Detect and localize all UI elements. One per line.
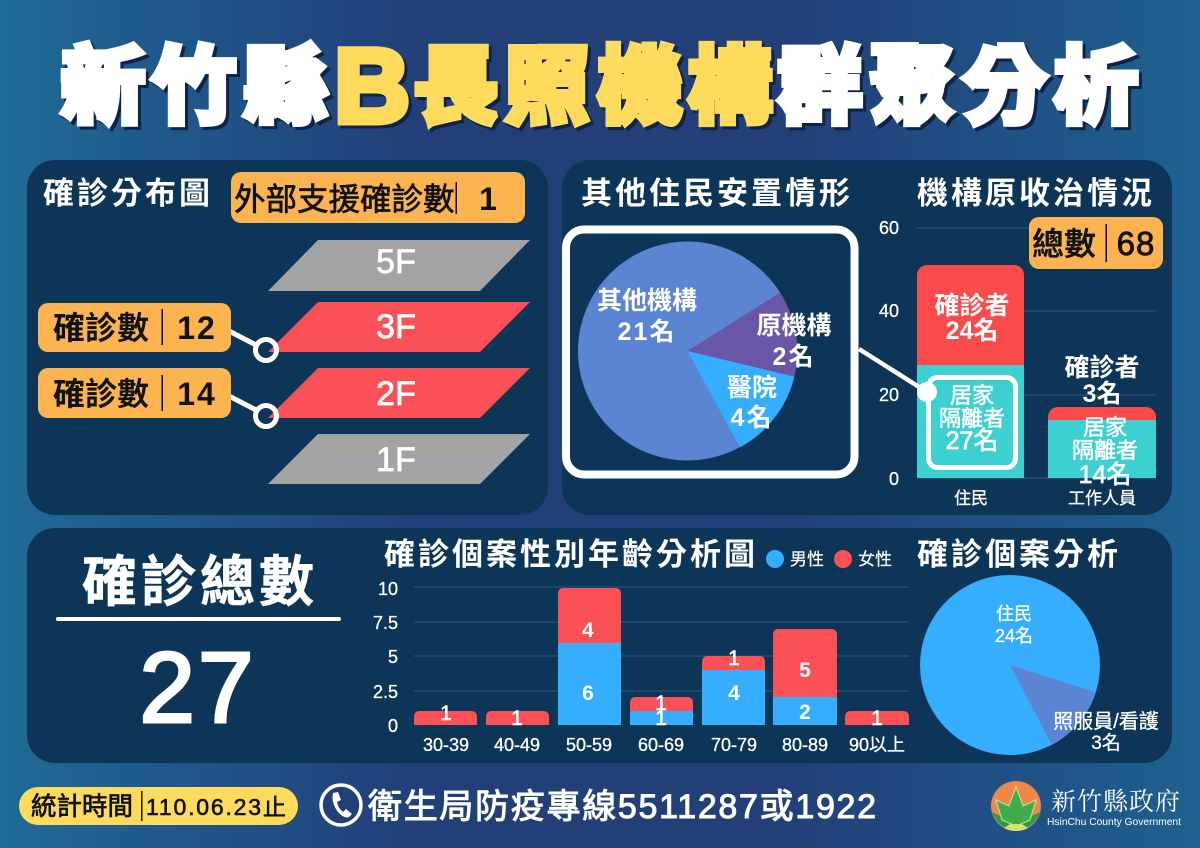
pie chart: placement: 2名 — [773, 343, 815, 371]
footer: hotline: 衛生局防疫專線5511287或1922 — [368, 788, 878, 826]
floor 3F — [268, 302, 530, 352]
title: 機 — [601, 43, 685, 137]
callout: 2F count: 14 — [177, 376, 217, 412]
floor 1F — [268, 434, 530, 484]
legend: 女性 — [858, 550, 892, 569]
bar: residents: 27名 — [946, 427, 998, 455]
bar chart: capacity: 20 — [879, 385, 899, 405]
bar: 30-39: 1 — [440, 702, 452, 725]
bar: staff — [1048, 354, 1156, 489]
callout: external support: 1 — [479, 181, 497, 217]
bar: residents: 隔離者 — [939, 406, 1005, 431]
bar: staff: 居家 — [1083, 415, 1127, 440]
total confirmed — [56, 551, 341, 744]
age labels — [423, 735, 905, 755]
bar: staff: 3名 — [1083, 380, 1121, 408]
callout: external support: 外部支援確診數 — [234, 181, 455, 217]
panel: residents — [562, 160, 1172, 515]
highlight frame — [566, 230, 854, 474]
heading: other residents placement: 其他住民安置情形 — [581, 176, 853, 211]
age labels: 90以上 — [849, 735, 905, 755]
title: 構 — [688, 40, 772, 134]
bar: staff: 14名 — [1079, 461, 1131, 489]
pie chart: cases: 照服員/看護 — [1053, 710, 1159, 733]
bar: 70-79: 1 — [728, 647, 740, 670]
bar: 40-49: 1 — [511, 707, 523, 730]
floor 2F: 2F — [376, 375, 416, 413]
title: 聚 — [873, 43, 957, 137]
callout: 2F count — [38, 368, 276, 426]
footer: statistics time: 110.06.23止 — [146, 794, 288, 820]
pie chart: cases — [920, 575, 1159, 755]
floor 3F: 3F — [376, 308, 416, 346]
pie chart: cases: 住民 — [996, 604, 1032, 624]
logo: 新竹縣政府 — [1051, 782, 1181, 818]
stacked bar chart: 0 — [388, 716, 398, 736]
callout: total: 總數 — [1032, 226, 1096, 262]
callout: external support — [231, 172, 525, 223]
title: 縣 — [244, 40, 328, 134]
axis labels — [954, 489, 1136, 508]
axis labels: 住民 — [954, 489, 988, 508]
total confirmed: 27 — [139, 632, 257, 744]
age labels: 80-89 — [782, 735, 828, 755]
stacked bar chart: 2.5 — [373, 682, 398, 702]
bar: 90+: 1 — [871, 707, 883, 730]
title: 長 — [414, 40, 498, 134]
title: 聚 — [870, 40, 954, 134]
bar: 90+ — [845, 707, 909, 730]
bar: 50-59 — [558, 588, 621, 725]
stacked bar chart — [373, 579, 909, 755]
callout: total — [1029, 217, 1163, 269]
icon: phone — [321, 785, 361, 825]
label: other facilities: 其他機構 — [597, 287, 697, 315]
bar: 80-89: 2 — [799, 701, 811, 724]
bar: 80-89: 5 — [799, 659, 811, 682]
callout: 2F count: 確診數 — [53, 376, 149, 412]
callout: 3F count: 確診數 — [53, 310, 149, 346]
title: 縣 — [247, 43, 331, 137]
age labels: 70-79 — [711, 735, 757, 755]
title: 照 — [508, 43, 592, 137]
floor 1F: 1F — [376, 441, 416, 479]
connector line — [859, 349, 937, 402]
stacked bar chart: 10 — [378, 579, 398, 599]
heading: original capacity: 機構原收治情況 — [917, 176, 1155, 211]
bar: staff: 確診者 — [1064, 354, 1140, 382]
heading: sex age chart: 確診個案性別年齡分析圖 — [384, 537, 758, 572]
stacked bar chart: 7.5 — [373, 613, 398, 633]
pie chart: placement: 21名 — [618, 318, 676, 346]
bar: residents: 居家 — [950, 383, 994, 408]
bar: 60-69: 1 — [655, 707, 667, 730]
pie chart: cases: 3名 — [1091, 732, 1121, 754]
total confirmed: 確診總數 — [82, 551, 318, 613]
age labels: 30-39 — [423, 735, 469, 755]
panel: bottom — [27, 528, 1172, 763]
label: original facility: 原機構 — [756, 312, 832, 340]
bar: 50-59: 6 — [582, 682, 594, 705]
bar: 70-79 — [702, 647, 765, 725]
floor 2F — [268, 368, 530, 418]
panel: confirmed distribution — [27, 160, 548, 515]
title: 構 — [691, 43, 775, 137]
floor 5F: 5F — [376, 243, 416, 281]
age labels: 50-59 — [566, 735, 612, 755]
title: 新 — [61, 40, 145, 134]
footer: statistics time — [19, 787, 298, 825]
title: B — [337, 31, 413, 148]
icon: county emblem — [991, 781, 1041, 831]
bar: 60-69 — [630, 692, 693, 730]
bar chart: capacity: 60 — [879, 218, 899, 238]
title: 群 — [781, 43, 865, 137]
title: 機 — [598, 40, 682, 134]
bar chart: capacity: 40 — [879, 301, 899, 321]
bar: residents: 確診者 — [934, 292, 1010, 320]
bar: 30-39 — [414, 702, 477, 725]
axis labels: 工作人員 — [1068, 489, 1136, 508]
legend: 男性 — [790, 550, 824, 569]
bar chart: capacity: 0 — [889, 469, 899, 489]
pie chart: cases: 24名 — [995, 626, 1033, 646]
footer: statistics time: 統計時間 — [31, 793, 133, 821]
title: 分 — [966, 43, 1050, 137]
pie chart: placement: 4名 — [731, 404, 773, 432]
callout: total: 68 — [1117, 225, 1155, 262]
bar: staff: 隔離者 — [1072, 438, 1138, 463]
title: 析 — [1054, 40, 1138, 134]
bar: 60-69: 1 — [655, 692, 667, 715]
bar: 40-49 — [486, 707, 549, 730]
bar: residents — [917, 265, 1024, 478]
bar: residents: 24名 — [946, 317, 998, 345]
logo — [991, 781, 1181, 831]
title: 竹 — [155, 43, 239, 137]
stacked bar chart: 5 — [388, 647, 398, 667]
bar: 50-59: 4 — [582, 619, 594, 642]
title: 竹 — [152, 40, 236, 134]
title: 長 — [417, 43, 501, 137]
title — [61, 28, 1141, 148]
floor 5F — [268, 240, 530, 291]
callout: 3F count — [38, 303, 276, 360]
legend — [766, 550, 892, 569]
label: hospital: 醫院 — [727, 374, 777, 402]
pie chart: placement — [578, 242, 832, 460]
age labels: 60-69 — [638, 735, 684, 755]
heading: distribution: 確診分布圖 — [43, 176, 213, 211]
title: 析 — [1057, 43, 1141, 137]
callout: 3F count: 12 — [177, 310, 217, 346]
bar: 80-89 — [773, 629, 837, 725]
logo: HsinChu County Government — [1047, 816, 1181, 828]
bar chart: capacity — [879, 218, 1156, 508]
bar: 70-79: 4 — [728, 682, 740, 705]
title: 新 — [64, 43, 148, 137]
title: 分 — [963, 40, 1047, 134]
heading: case analysis: 確診個案分析 — [917, 537, 1121, 572]
title: 群 — [778, 40, 862, 134]
title: B — [334, 28, 410, 145]
age labels: 40-49 — [494, 735, 540, 755]
title: 照 — [505, 40, 589, 134]
